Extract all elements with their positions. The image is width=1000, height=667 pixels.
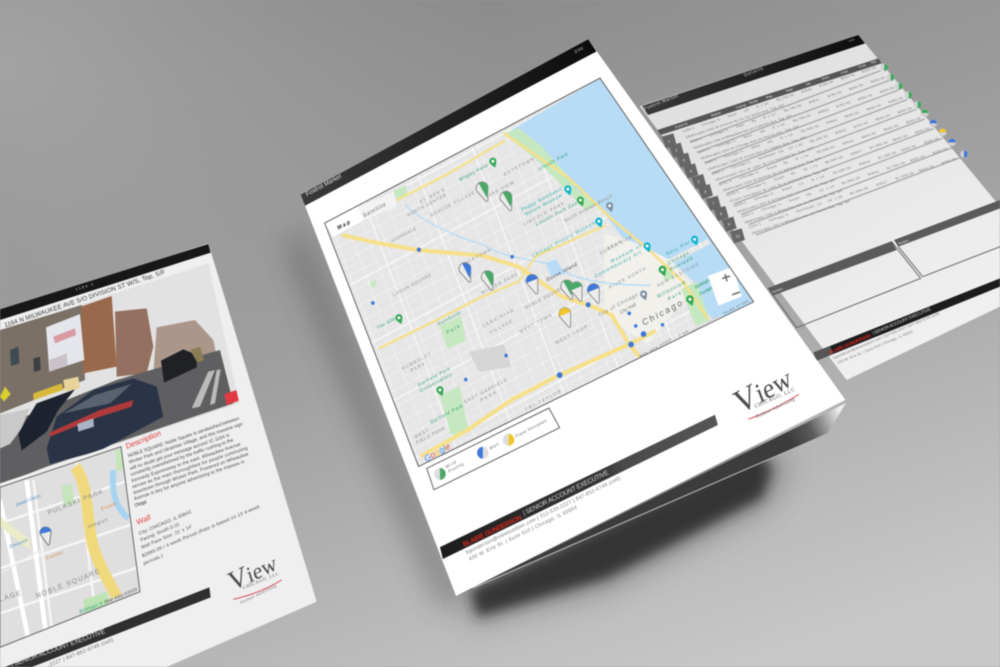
place labels: LINCOLN PARK <box>523 200 565 227</box>
center sheet footer <box>440 415 718 563</box>
table rows: (Wallscape) 1243 W Chicago Ave n/s Racine Ave, Top, S/F <box>700 125 800 160</box>
table rows: 5 <box>698 180 700 184</box>
description block: NOBLE SQUARE: Noble Square is sandwiched between <box>127 416 240 458</box>
site minimap: Integrys <box>87 517 108 529</box>
description block: downtown through Wicker Park. Postered on Milwaukee <box>133 451 250 495</box>
table rows: 5463-1 Chicago IL South C1 9' x 14' $3,595.00 60642 $1,095.00 $590.00 $390.00 <box>733 137 940 208</box>
place labels: Chicago <box>667 250 690 267</box>
table rows: 1163-1 Chicago IL Northeast C1 18' x 48' $5,995.00 60647 $1,095.00 $590.00 $390.00 <box>748 157 957 229</box>
table rows: 2 <box>675 149 677 153</box>
left sheet logo: CHICAGO, LLC <box>242 572 279 591</box>
table header: Facing <box>735 103 747 109</box>
site minimap: PULASKI PARK <box>47 488 104 517</box>
highway shields <box>371 248 664 381</box>
table rows: (Wallscape) 953 N Orleans Ave n/s Locust St, Top, S/F <box>736 178 837 214</box>
river <box>404 204 651 285</box>
description block: serves as the main thoroughfare for people commuting <box>132 445 249 489</box>
wall specification block: Facing: South (LU) <box>140 521 180 543</box>
place labels: ROSCOE VILLAGE <box>430 190 475 218</box>
table rows <box>662 64 968 243</box>
wall specification block: $2995.00 / 4 week Period (Rate is based on 13 4-week <box>142 504 261 558</box>
table header: Net <box>870 60 877 64</box>
table rows: 10 <box>736 234 740 238</box>
place labels: AVONDALE <box>390 226 417 244</box>
place labels: Goose Island <box>546 262 578 283</box>
map legend <box>427 408 560 490</box>
table rows: 1164-1 Chicago IL South US 21' x 14' $2,995.00 60642 $1,095.00 $590.00 $390.00 <box>740 147 949 218</box>
legend: wild posting: Wild <box>445 459 456 469</box>
place labels: ST. BEN'S <box>419 187 446 205</box>
description block: Chicago! <box>134 499 147 508</box>
place labels: Nature Museum <box>524 193 563 218</box>
site minimap: NOBLE SQUARE <box>35 568 101 600</box>
place labels: Fountain <box>699 285 714 297</box>
center sheet top bar: 2/44 <box>574 45 584 55</box>
place labels <box>376 151 749 445</box>
place labels: NEW EASTSIDE <box>656 261 700 288</box>
place labels: NORTH SIDE <box>599 234 633 256</box>
table rows: 1164-1 Chicago IL West US 8' x 14' $2,795.00 60642 $780.00 $590.00 $390.00 <box>682 66 877 133</box>
row type icons <box>881 64 968 158</box>
table header: Market <box>710 111 722 117</box>
place markers <box>394 157 700 397</box>
place labels: Wrigley Field <box>458 163 489 184</box>
center sheet footer: BLAIRE GUNDERSON <box>462 514 523 549</box>
place labels: Terms of Use <box>723 299 749 316</box>
place labels: UKRAINIAN <box>481 307 514 329</box>
table rows: 8 <box>720 212 722 216</box>
table rows: (Wallscape) 1363 W Grand Ave s/o Ogden Ave, Top, N/F <box>707 135 807 171</box>
place labels: Museum of <box>610 243 643 265</box>
site minimap: Eckhart P <box>79 601 104 615</box>
right sheet footer: | SENIOR ACCOUNT EXECUTIVE <box>871 307 932 335</box>
right sheet top bar: 2/44 <box>848 37 856 43</box>
site minimap: Map data ©2020 <box>104 586 138 604</box>
site title: 1164 N MILWAUKEE AVE S/O DIVISION ST W/S, Top, S/F <box>4 269 166 329</box>
center sheet logo: CHICAGO, LLC <box>754 387 796 410</box>
description block: Description <box>125 428 162 451</box>
place labels: NORTH CENTER <box>406 192 447 218</box>
table header: Prod <box>858 63 867 69</box>
legend: wall: Wall <box>489 441 499 451</box>
table rows: (Wallscape) 1440 W Division St n/s Ashland Ave, Top, S/F <box>722 157 822 192</box>
place labels: The 606 <box>376 316 396 332</box>
legend: wild posting: Posting <box>448 461 464 474</box>
place labels: VILLAGE <box>489 318 513 335</box>
red gallery button <box>224 390 239 405</box>
site minimap: Division <box>9 537 29 549</box>
right sheet footer: bgunderson@viewoutdoor.com | 312-533-2227 | 847-852-6749 (cell) <box>832 312 940 360</box>
center sheet fold underside <box>456 403 846 596</box>
place labels: LOGAN SQUARE <box>392 272 432 297</box>
place labels: Map data ©2020 <box>639 338 672 358</box>
center sheet footer: | SENIOR ACCOUNT EXECUTIVE <box>522 469 610 517</box>
place labels: HUMBOLDT <box>401 351 431 371</box>
wall specification block: Wall <box>135 512 152 527</box>
map type tabs: Satellite <box>363 202 387 219</box>
inventory pins <box>457 180 604 329</box>
place labels: Conservatory <box>419 371 453 394</box>
table header: Rate <box>785 87 794 93</box>
place labels: Peggy Notebaert <box>521 186 563 213</box>
center sheet logo: Outdoor Advertising <box>755 396 796 419</box>
place labels: Lincoln Park <box>538 151 569 172</box>
street grid <box>338 138 706 464</box>
table rows: 1243-1 Chicago IL West US 8' x 14' $2,795.00 60622 $780.00 $590.00 $390.00 <box>696 86 895 154</box>
place labels: NEAR <box>606 239 622 251</box>
place labels: WEST TOWN <box>519 313 552 334</box>
table rows: 2164-1 Chicago IL East 89 8' x 14' $2,795.00 60647 $780.00 $590.00 $390.00 <box>689 76 886 144</box>
panel: center sheet with market map <box>301 39 845 596</box>
right sheet top bar <box>642 35 865 115</box>
place labels: TRI-TAYLOR <box>524 388 562 412</box>
table rows: (Wallscape) 1327 N Milwaukee Ave w/o Damen Ave, Top, S/F <box>751 199 851 235</box>
place labels: Garfield Park <box>417 366 452 389</box>
table rows: 5440-1 Chicago IL South 89 20' x 71' $5,995.00 60607 $1,095.00 $590.00 $390.00 <box>726 127 931 197</box>
panel: left sheet with site detail <box>0 243 317 667</box>
table rows: (Trans Overpass) W Lake St at Ashland Ave, Top, S/F <box>729 167 829 203</box>
table rows: 1 <box>668 139 670 143</box>
description block: Kennedy Expressway to the east. Milwaukee Avenue <box>131 441 242 483</box>
place labels: Garfield Park <box>430 403 464 426</box>
site minimap: Jewel-Osco <box>15 493 41 508</box>
left sheet top bar: 1164-1 <box>75 282 94 292</box>
site minimap <box>0 447 140 647</box>
place labels: PARK <box>480 389 497 403</box>
place labels: NOBLE SQUARE <box>524 285 564 310</box>
table rows: (Wallscape) 801 W Lake St n/s Halsted St, Top, S/F <box>714 146 815 182</box>
place labels: City of Chicago <box>598 292 639 319</box>
center sheet top bar: Foxtrot Market <box>305 173 343 198</box>
table rows: 5463-1 Chicago IL Northeast US 10' x 20' $2,495.00 60642 $750.00 $590.00 $390.00 <box>711 106 913 176</box>
place labels: Lincoln Park Zoo <box>535 200 578 228</box>
legend: wild posting <box>434 459 464 480</box>
place labels: WEST LOOP <box>555 324 588 345</box>
place labels: FIELD PARK <box>415 425 446 445</box>
place labels: WICKER PARK <box>480 271 518 295</box>
notes boxes: Notes <box>897 238 910 246</box>
highways <box>344 134 708 455</box>
icon: map pin <box>39 526 54 546</box>
place labels: LAKE VIEW <box>485 179 515 199</box>
center sheet cast shadows <box>285 225 790 625</box>
table rows: (Wallscape) 2164 N Milwaukee Ave s/o Fullerton Ave, Top, S/F <box>692 114 793 150</box>
table rows: (Wallscape) 1164 N Milwaukee Ave s/o Division St, Top, S/F <box>744 189 844 224</box>
right sheet footer: BLAIRE GUNDERSON <box>828 333 873 355</box>
street photo <box>0 257 243 490</box>
lake water <box>511 78 754 319</box>
table rows: 9 <box>728 223 730 227</box>
place labels: Park <box>446 323 461 336</box>
place labels: WEST <box>414 427 429 440</box>
place labels: Park <box>667 290 683 303</box>
zoom control <box>708 267 742 306</box>
description block: will no doubt get your message across! IC-1164 is <box>129 432 231 471</box>
table rows: 1363-1 Chicago IL West US 8' x 14' $2,495.00 60642 $590.00 $590.00 $390.00 <box>704 96 904 165</box>
right sheet top bar: Foxtrot Market <box>643 93 680 111</box>
map type tabs: Map <box>337 219 352 232</box>
table rows: 6721-4 Chicago IL South 89 8' x 14' $3,995.00 60642 $900.00 $590.00 $390.00 <box>718 117 922 186</box>
left sheet top bar <box>0 244 211 320</box>
notes boxes: Notes <box>771 286 784 294</box>
place labels: Chicago History Museum <box>531 220 597 259</box>
wall specification block: Wall Face Size: 21' x 14' <box>141 524 193 550</box>
google wordmark: Google <box>423 440 452 464</box>
table rows: 4 <box>690 169 692 173</box>
table header: Route <box>748 99 759 105</box>
place labels: PARK <box>410 361 426 373</box>
place labels: North Avenue Beach <box>564 193 614 224</box>
place labels: RIVER NORTH <box>608 266 647 290</box>
center sheet logo: View <box>729 358 797 422</box>
place labels: Contemporary Art <box>594 249 642 280</box>
legend: trans overpass: Trans Overpass <box>514 418 547 439</box>
site minimap: Frontier <box>46 549 64 561</box>
description block <box>125 416 250 508</box>
table header: Panel ID <box>674 122 689 129</box>
left sheet logo: View <box>225 546 280 597</box>
description block: Avenue is key for anyone advertising to the masses in <box>133 459 245 501</box>
center sheet footer: bgunderson@viewoutdoor.com | 312-533-2227 | 847-852-6749 (cell) <box>465 475 622 556</box>
place labels: 1 km ___________ <box>678 313 719 338</box>
place labels: Humboldt <box>437 310 462 328</box>
table rows: 7 <box>712 202 714 206</box>
wall specification block: City: CHICAGO, IL 60642 <box>138 509 192 536</box>
center sheet top bar <box>301 39 596 206</box>
place labels: Chicago <box>641 297 683 328</box>
table header: Zip <box>805 81 812 86</box>
left sheet logo: Outdoor Advertising <box>240 584 277 605</box>
center sheet footer: 430 W. Erie St. | Suite 510 | Chicago, IL 60654 <box>468 505 578 563</box>
right sheet footer <box>813 278 1000 365</box>
description block: constantly overwhelmed by the traffic rushing to the <box>130 437 234 477</box>
right sheet top bar: Details <box>743 66 765 78</box>
place labels: Buckingham <box>694 275 715 291</box>
panel: right sheet with details table <box>640 35 1000 380</box>
place labels: Riverwalk <box>669 255 695 273</box>
place labels: BUCKTOWN <box>460 247 492 268</box>
market map <box>324 77 755 468</box>
right sheet footer: 430 W. Erie St. | Suite 510 | Chicago, IL 60654 <box>837 330 914 365</box>
table header: Cost <box>840 69 849 75</box>
place labels: City Hall <box>619 302 637 316</box>
table header <box>657 58 882 135</box>
wall specification block: periods.) <box>143 553 164 566</box>
table rows: 3 <box>683 159 685 163</box>
table rows: 6 <box>704 190 706 194</box>
table rows: (Wallscape) 1154 W Division St n/s 1st Street Ave, Top, S/F <box>685 103 785 139</box>
site minimap: Estate <box>101 501 117 512</box>
description block: Wicker Park and Ukrainian Village, and this massive sign <box>128 421 244 465</box>
left sheet footer <box>5 587 211 667</box>
place labels: BOYSTOWN <box>503 156 535 177</box>
table header: Map <box>765 94 774 99</box>
map type tabs <box>325 193 397 237</box>
table header: Rent <box>821 75 830 81</box>
place labels: Millennium <box>656 279 687 300</box>
parks <box>370 128 710 435</box>
place labels: EAST GARFIELD <box>464 377 508 405</box>
place labels: Navy Pier <box>665 239 691 258</box>
notes boxes <box>768 200 1000 328</box>
